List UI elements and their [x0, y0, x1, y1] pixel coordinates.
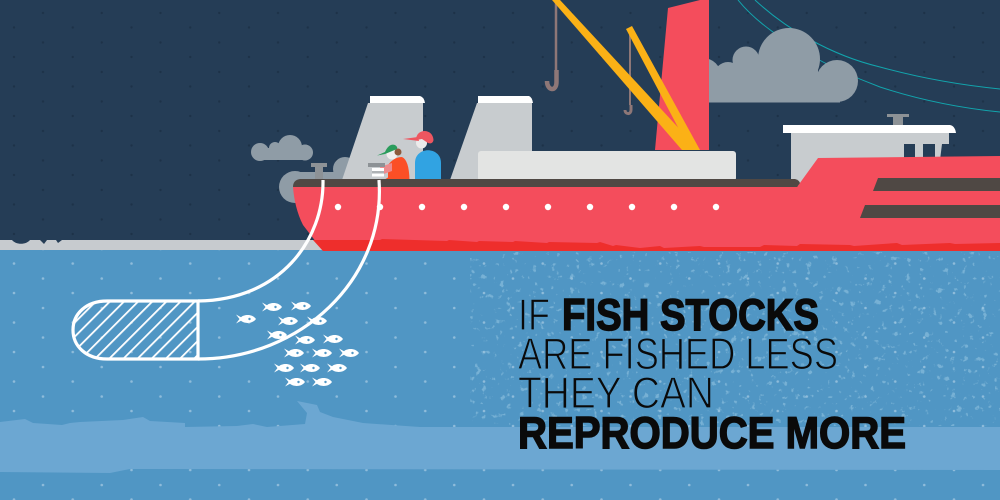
- horizon band: [0, 240, 330, 250]
- ship hull: [293, 156, 1000, 251]
- headline: IF: [518, 291, 550, 340]
- teal cables: [738, 0, 1000, 112]
- light water band: [0, 401, 1000, 473]
- ventilator: middle: [450, 96, 533, 180]
- cloud: behind ship: [279, 157, 360, 203]
- fisherman: blue: [403, 131, 441, 180]
- hull stripes: [873, 178, 1000, 191]
- headline: FISH STOCKS: [562, 291, 819, 340]
- ventilator: left: [342, 96, 425, 180]
- stack on deck: [311, 163, 327, 180]
- hook: right: [625, 35, 631, 114]
- fish school: [236, 302, 359, 386]
- waterline: [313, 239, 1000, 251]
- portholes: [335, 204, 719, 210]
- water speckles: [470, 252, 1000, 426]
- hook: left: [547, 0, 556, 89]
- fishing net: [73, 180, 379, 359]
- headline: [518, 291, 906, 458]
- wheelhouse: [783, 114, 956, 187]
- cloud: left: [251, 135, 313, 161]
- deck stripe: [293, 179, 800, 187]
- crates: [368, 163, 385, 180]
- hatched cod end: [73, 301, 198, 359]
- funnel: [655, 0, 709, 150]
- fisherman: orange: [377, 145, 410, 188]
- headline: THEY CAN: [518, 369, 714, 418]
- sky background: [0, 0, 1000, 250]
- crane arms: [552, 0, 700, 150]
- headline: REPRODUCE MORE: [518, 409, 906, 458]
- cloud: right: [685, 28, 858, 102]
- cargo hold: [478, 151, 736, 181]
- headline: ARE FISHED LESS: [518, 330, 838, 379]
- water: [0, 250, 1000, 500]
